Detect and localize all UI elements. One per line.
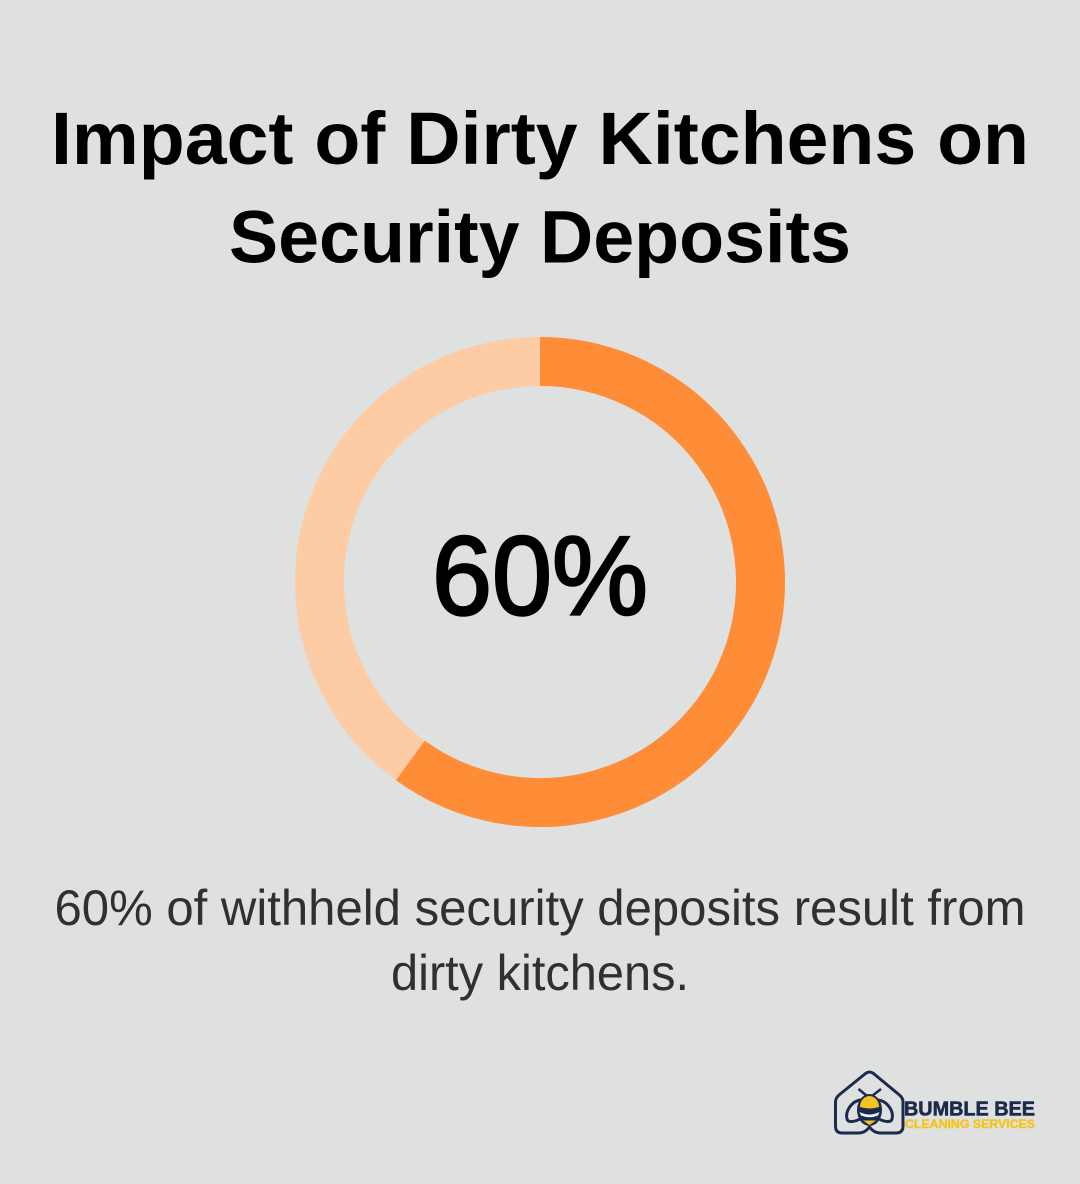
- title: Security Deposits: [229, 196, 851, 278]
- description text: dirty kitchens.: [391, 945, 689, 1001]
- logo: Bumble Bee Cleaning Services: [836, 1072, 1035, 1133]
- bee body: [857, 1094, 882, 1126]
- title: [51, 97, 1029, 278]
- description text: 60% of withheld security deposits result from: [54, 880, 1026, 936]
- bee wings: [847, 1100, 862, 1122]
- logo tagline: CLEANING SERVICES: [905, 1119, 1035, 1131]
- remaining 40% segment: [319, 362, 540, 760]
- icon: house with bee: [836, 1072, 903, 1133]
- logo wordmark: BUMBLE BEE: [904, 1098, 1035, 1120]
- donut chart: 60%: [319, 362, 760, 802]
- description text: [54, 880, 1026, 1001]
- center value: 60%: [432, 514, 648, 638]
- title: Impact of Dirty Kitchens on: [51, 97, 1029, 180]
- highlighted 60% segment: [410, 362, 760, 802]
